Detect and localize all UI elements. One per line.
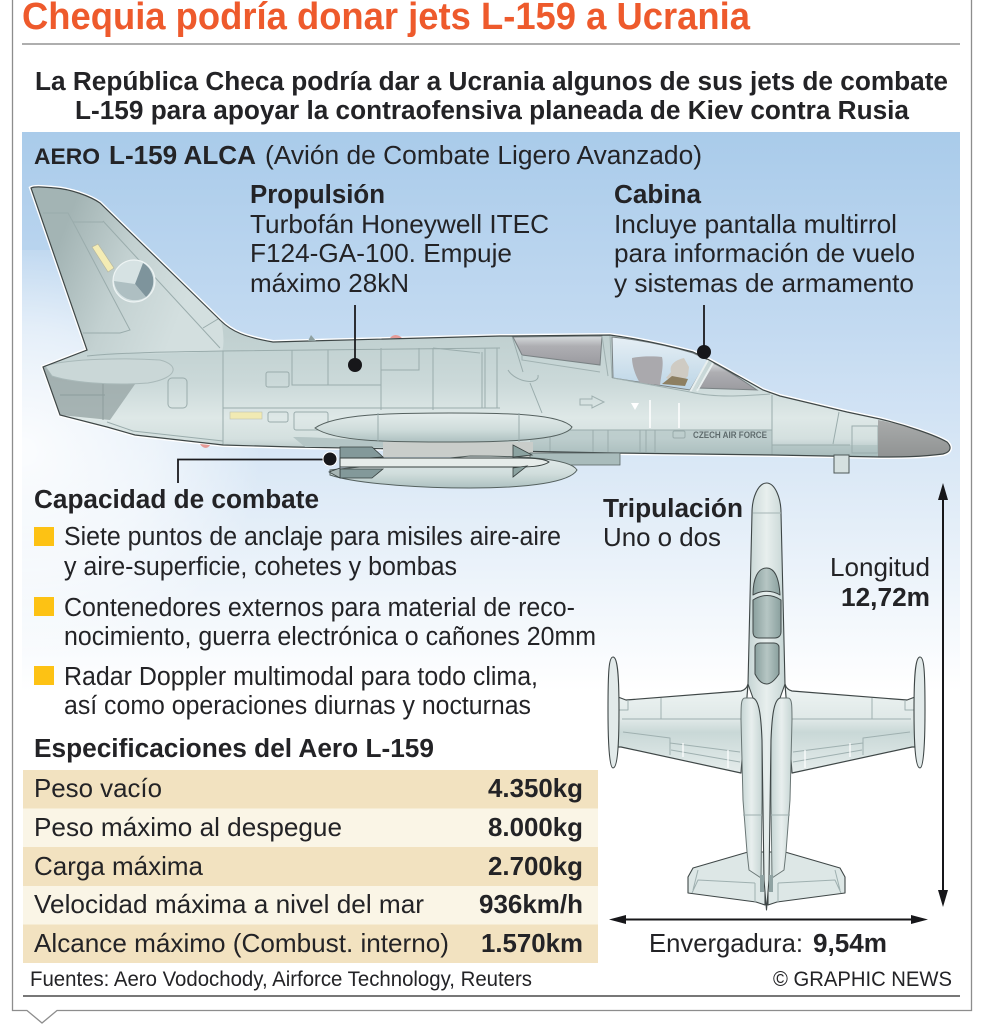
exhaust nozzles bbox=[760, 875, 773, 892]
arrow: length bbox=[938, 483, 948, 907]
callout: propulsión: Propulsión bbox=[250, 181, 385, 209]
subtitle bbox=[35, 68, 948, 125]
yellow fin marking bbox=[92, 244, 114, 272]
roundel bbox=[113, 260, 155, 302]
front canopy glass bbox=[612, 337, 708, 390]
bullet 2: Contenedores externos para material de reco- bbox=[64, 594, 575, 622]
top view aircraft bbox=[608, 483, 925, 910]
table: specifications: 1.570km bbox=[481, 928, 583, 958]
aircraft heading: (Avión de Combate Ligero Avanzado) bbox=[265, 142, 702, 170]
lower fuselage bands bbox=[530, 430, 878, 457]
callout: propulsión: F124-GA-100. Empuje bbox=[250, 238, 512, 268]
table: specifications: Peso vacío bbox=[34, 773, 162, 803]
bullet 1: Siete puntos de anclaje para misiles aire-aire bbox=[64, 523, 561, 551]
canopy panes bbox=[753, 568, 781, 684]
bullet 1 bbox=[34, 523, 561, 581]
bullet 1: y aire-superficie, cohetes y bombas bbox=[64, 553, 457, 581]
bullet 2: nocimiento, guerra electrónica o cañones 20mm bbox=[64, 623, 596, 651]
windshield bbox=[698, 363, 757, 390]
fuselage and fin silhouette bbox=[31, 187, 950, 457]
engine nacelle bbox=[771, 698, 792, 878]
subtitle: L-159 para apoyar la contraofensiva planeada de Kiev contra Rusia bbox=[75, 97, 910, 125]
length label bbox=[830, 552, 930, 612]
side view aircraft bbox=[31, 187, 950, 488]
crew text: Tripulación bbox=[603, 495, 743, 523]
yellow fuselage marking bbox=[230, 412, 262, 419]
bullet 3: Radar Doppler multimodal para todo clima, bbox=[64, 663, 538, 691]
leader: cabina bbox=[697, 305, 711, 359]
right half bbox=[768, 657, 925, 905]
pylon belly bbox=[293, 437, 620, 465]
lower pod bbox=[330, 456, 577, 488]
wing tip tank bbox=[914, 657, 925, 768]
left half bbox=[608, 657, 765, 905]
table: specifications: 8.000kg bbox=[488, 812, 583, 842]
bullet 3: así como operaciones diurnas y nocturnas bbox=[64, 692, 531, 720]
callout: cabina: y sistemas de armamento bbox=[614, 268, 914, 298]
crew text bbox=[603, 495, 743, 552]
heading: especificaciones: Especificaciones del Aero L-159 bbox=[34, 735, 434, 763]
callout: propulsión: Turbofán Honeywell ITEC bbox=[250, 209, 549, 239]
table: specifications: 936km/h bbox=[479, 889, 583, 919]
callout: propulsión: máximo 28kN bbox=[250, 268, 409, 298]
landing gear bbox=[834, 455, 849, 473]
aircraft heading: AERO bbox=[34, 144, 100, 169]
central fuselage bbox=[748, 483, 785, 910]
table: specifications: Velocidad máxima a nivel del mar bbox=[34, 889, 424, 919]
wingspan label: 9,54m bbox=[813, 930, 887, 958]
subtitle: La República Checa podría dar a Ucrania algunos de sus jets de combate bbox=[35, 68, 948, 96]
heading: capacidad de combate: Capacidad de combate bbox=[34, 486, 319, 514]
callout: cabina: Incluye pantalla multirrol bbox=[614, 209, 897, 239]
credit: © GRAPHIC NEWS bbox=[773, 968, 952, 991]
table: specifications: Alcance máximo (Combust. interno) bbox=[34, 928, 449, 958]
pilot and seat bbox=[632, 356, 689, 386]
dorsal bumps bbox=[308, 335, 316, 341]
rear canopy bbox=[513, 336, 602, 365]
table: specifications: Carga máxima bbox=[34, 851, 204, 881]
leader: propulsión bbox=[348, 305, 362, 372]
outline bbox=[31, 187, 950, 457]
length label: Longitud bbox=[830, 552, 930, 582]
callout: cabina: Cabina bbox=[614, 181, 702, 209]
callout: propulsión bbox=[250, 181, 549, 298]
bullet 3 bbox=[34, 663, 538, 720]
crew text: Uno o dos bbox=[603, 522, 721, 552]
aircraft heading bbox=[34, 142, 702, 170]
callout: cabina: para información de vuelo bbox=[614, 238, 915, 268]
table: specifications: 2.700kg bbox=[488, 851, 583, 881]
radome bbox=[878, 420, 950, 457]
bullet 2 bbox=[34, 594, 596, 651]
aircraft heading: L-159 ALCA bbox=[109, 142, 256, 170]
wingspan label bbox=[649, 928, 887, 958]
arrow: wingspan bbox=[609, 915, 928, 924]
table: specifications: 4.350kg bbox=[488, 773, 583, 803]
panel: sky background bbox=[22, 132, 960, 692]
leader: capacidad de combate bbox=[178, 452, 337, 483]
table: specifications: Peso máximo al despegue bbox=[34, 812, 342, 842]
missile bbox=[329, 445, 549, 478]
sources: Fuentes: Aero Vodochody, Airforce Technology, Reuters bbox=[30, 968, 532, 991]
fuselage marks bbox=[580, 396, 604, 408]
tail fin bbox=[31, 187, 223, 354]
callout: cabina bbox=[614, 181, 915, 298]
table: specifications bbox=[23, 770, 598, 963]
fin and fuselage panel lines bbox=[43, 213, 878, 455]
length label: 12,72m bbox=[841, 584, 930, 612]
wingspan label: Envergadura: bbox=[649, 928, 803, 958]
list: combat capabilities bbox=[34, 523, 596, 720]
upper pod bbox=[315, 413, 572, 442]
serial text: CZECH AIR FORCE bbox=[693, 430, 767, 441]
exhaust shading bbox=[43, 367, 147, 420]
